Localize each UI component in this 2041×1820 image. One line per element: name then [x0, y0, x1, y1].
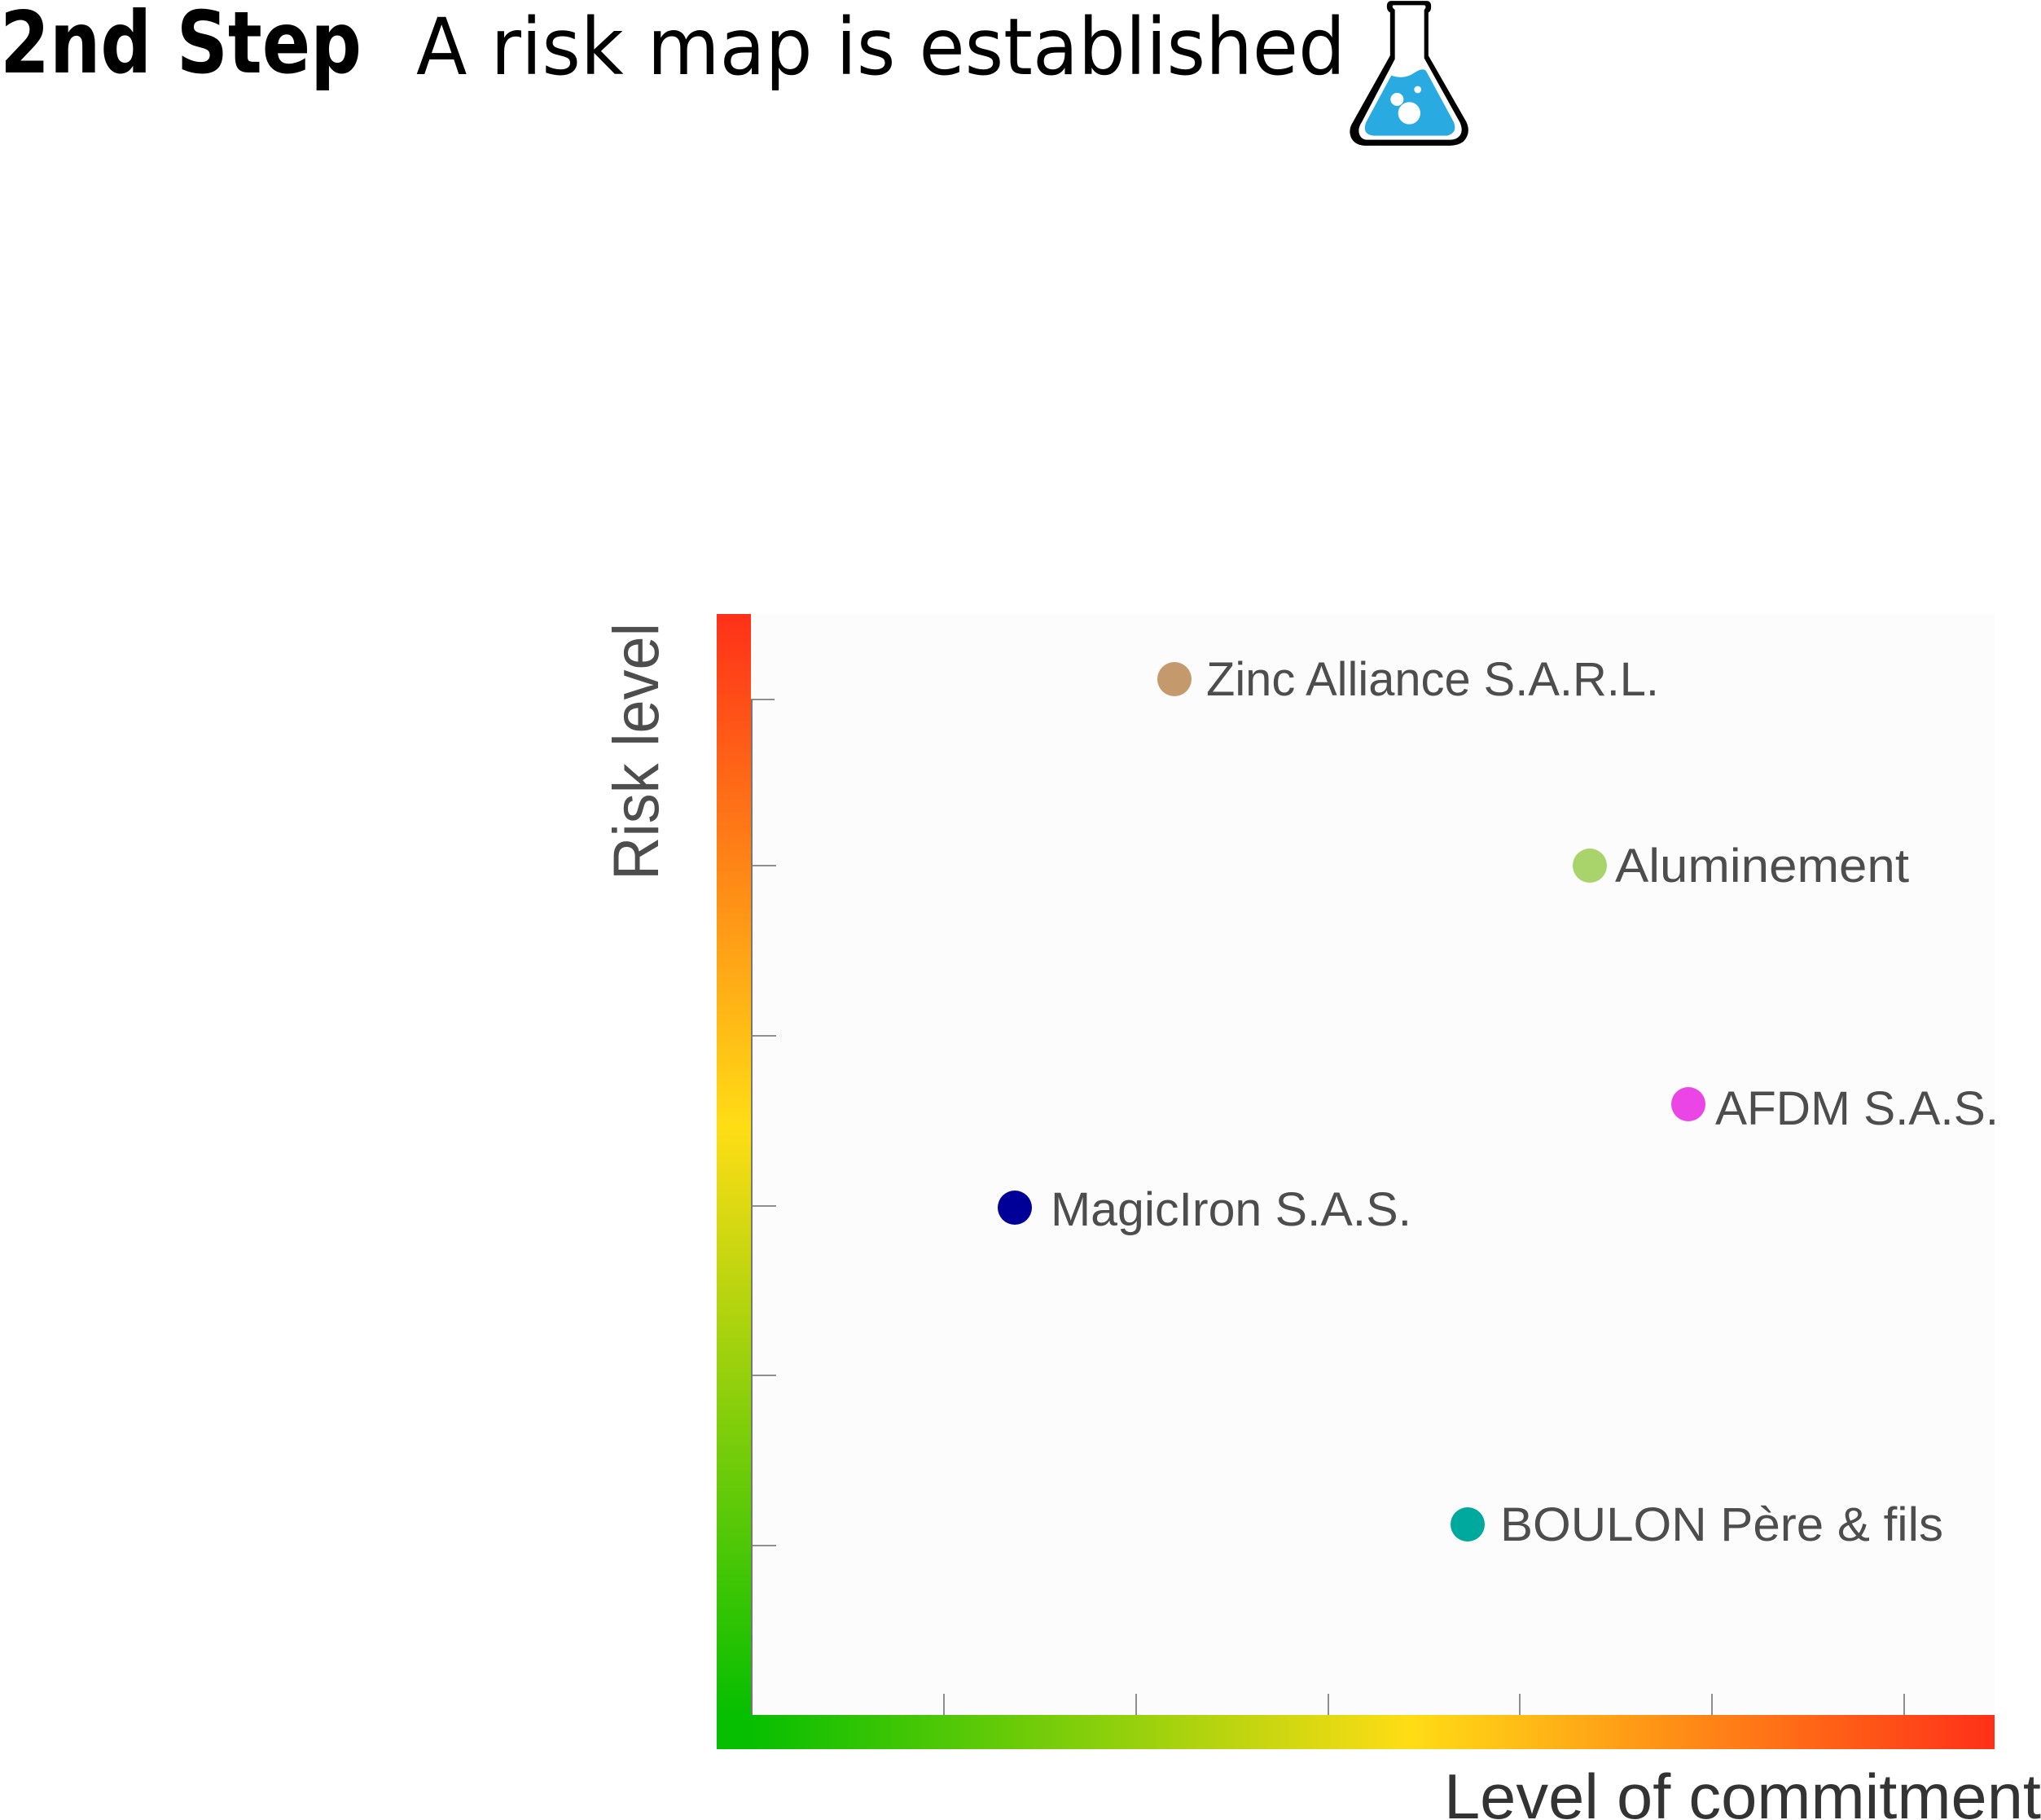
y axis gradient bar	[717, 614, 751, 1749]
x axis gradient bar	[751, 1715, 1995, 1749]
y axis edge line	[751, 699, 753, 1715]
point: MagicIron S.A.S.: MagicIron S.A.S.	[1051, 1183, 1411, 1236]
y axis title: Risk level	[599, 623, 672, 880]
plot area	[751, 614, 1995, 1715]
point: Aluminement: Aluminement	[1615, 840, 1909, 892]
y axis ticks	[751, 699, 776, 1546]
point: AFDM S.A.S.: AFDM S.A.S.	[1715, 1082, 1999, 1135]
x axis ticks	[944, 1694, 1904, 1715]
chart: risk map	[599, 614, 2041, 1820]
point: BOULON Père &amp; fils: BOULON Père & fils	[1500, 1498, 1943, 1551]
subtitle: A risk map is established: A risk map is established	[416, 2, 1345, 93]
icon: laboratory flask	[1350, 2, 1468, 145]
point: Zinc Alliance S.A.R.L.: Zinc Alliance S.A.R.L.	[1206, 653, 1659, 706]
